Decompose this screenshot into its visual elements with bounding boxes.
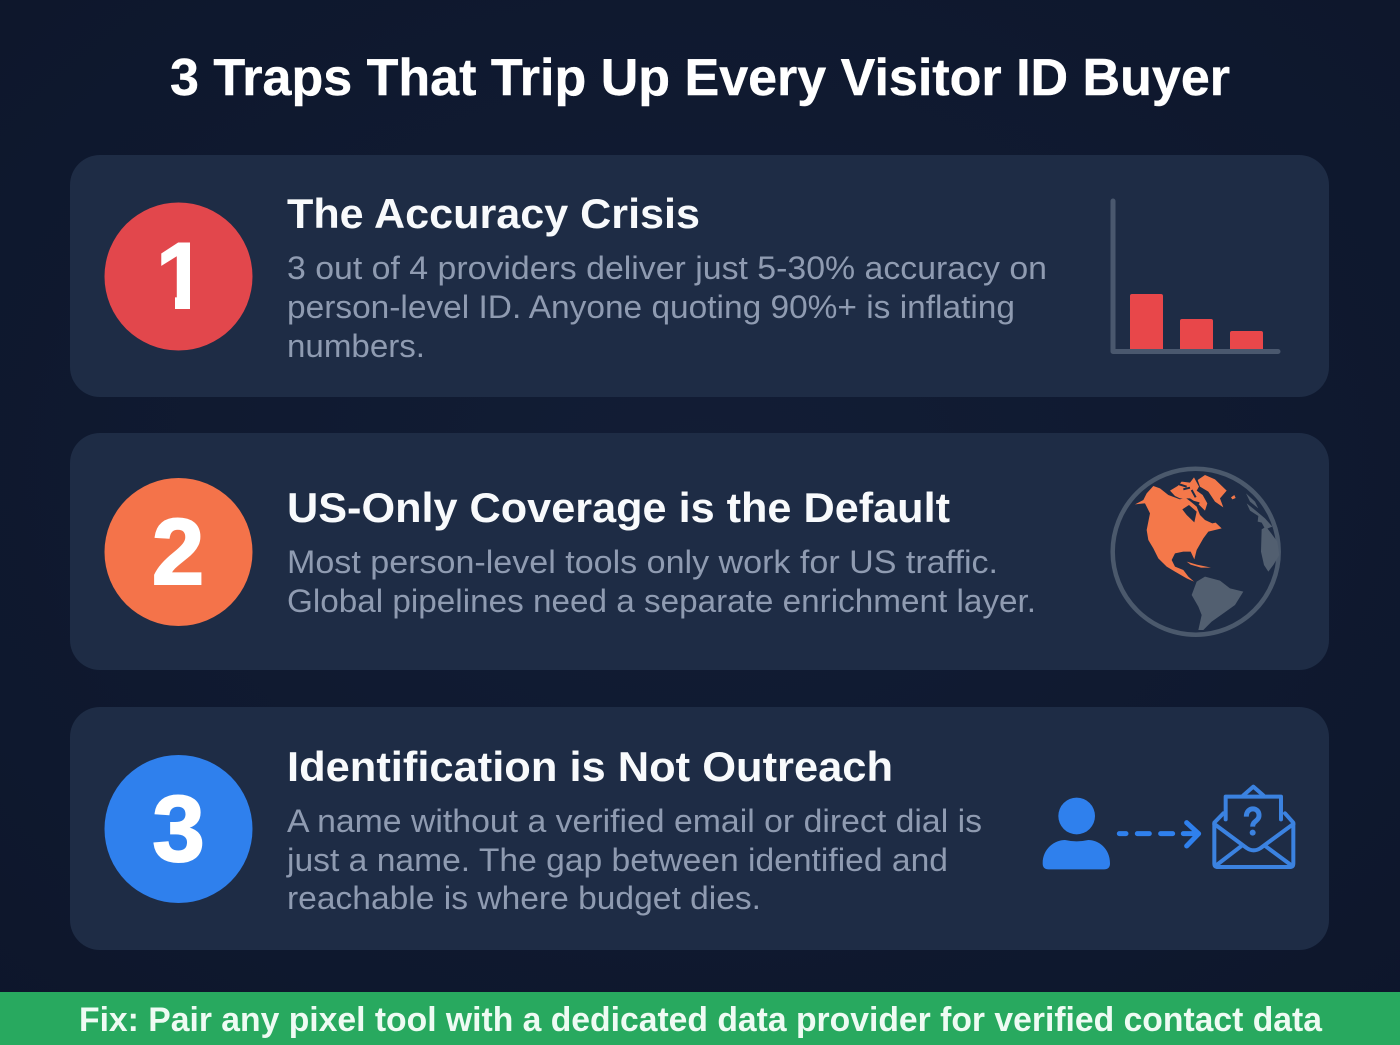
heading: us-only coverage: US-Only Coverage is the Default — [287, 484, 950, 531]
number badge 2 — [104, 478, 252, 626]
arrow: dashed — [1119, 823, 1199, 846]
body text: accuracy crisis: person-level ID. Anyone quoting 90%+ is inflating — [287, 289, 1015, 325]
body text: us-only coverage: Most person-level tools only work for US traffic. — [287, 544, 998, 580]
number badge 3: 3 — [152, 776, 205, 881]
icon: declining bar chart — [1113, 201, 1278, 352]
number badge 1: 1 — [156, 223, 208, 328]
heading: identification is not outreach: Identification is Not Outreach — [287, 743, 893, 790]
panel: the accuracy crisis — [70, 155, 1329, 397]
icon: person — [1043, 798, 1110, 869]
body text: us-only coverage — [287, 544, 1036, 619]
footer banner: fix — [0, 992, 1400, 1045]
icon: envelope with question mark — [1214, 787, 1293, 867]
panel: identification is not outreach — [70, 707, 1329, 950]
number badge 2: 2 — [152, 499, 204, 604]
body text: identification is not outreach: just a name. The gap between identified and — [286, 842, 948, 878]
title: 3 Traps That Trip Up Every Visitor ID Buyer — [170, 49, 1230, 107]
body text: accuracy crisis: 3 out of 4 providers deliver just 5-30% accuracy on — [287, 250, 1047, 286]
icon: person to dashed arrow to envelope — [1043, 787, 1293, 869]
body text: identification is not outreach — [286, 803, 982, 916]
number badge 1 — [104, 202, 252, 350]
north america — [1135, 475, 1236, 582]
panel: us-only coverage — [70, 433, 1329, 670]
icon: globe with north america highlighted — [1113, 469, 1279, 635]
body text: accuracy crisis — [287, 250, 1047, 364]
body text: identification is not outreach: reachable is where budget dies. — [287, 880, 761, 916]
heading: the accuracy crisis: The Accuracy Crisis — [287, 190, 700, 237]
body text: accuracy crisis: numbers. — [287, 328, 425, 364]
footer banner: fix: Fix: Pair any pixel tool with a dedicated data provider for verified contact data — [79, 1001, 1323, 1039]
body text: identification is not outreach: A name without a verified email or direct dial is — [287, 803, 982, 839]
number badge 3 — [104, 755, 252, 903]
body text: us-only coverage: Global pipelines need a separate enrichment layer. — [287, 583, 1036, 619]
south america, africa and europe — [1192, 493, 1279, 630]
